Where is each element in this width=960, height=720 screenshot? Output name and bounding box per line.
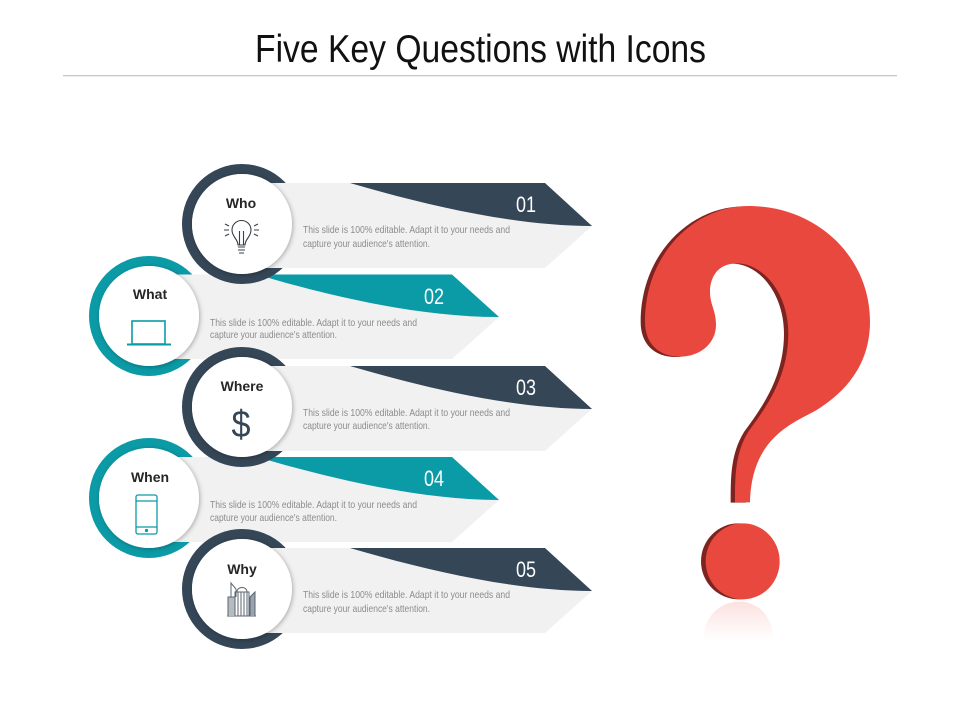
icon: smartphone [136, 495, 157, 534]
row 02: What [94, 261, 499, 371]
heading: Why [227, 561, 257, 577]
heading: When [131, 469, 169, 485]
body text [210, 317, 417, 341]
icon: laptop [127, 321, 171, 344]
body text [303, 224, 510, 250]
number: 04 [424, 466, 444, 491]
white disc [99, 266, 199, 366]
row 01: Who [187, 169, 592, 279]
teal ribbon [257, 457, 499, 500]
body text: capture your audience's attention. [210, 512, 337, 524]
ring [94, 261, 204, 371]
white disc [192, 539, 292, 639]
number: 02 [424, 284, 444, 309]
teal ribbon [257, 274, 499, 317]
dot depth [701, 523, 776, 599]
question mark [641, 206, 870, 640]
navy ribbon [350, 366, 592, 409]
body text: capture your audience's attention. [303, 238, 430, 250]
white disc [192, 357, 292, 457]
ring [187, 169, 297, 279]
white disc [99, 448, 199, 548]
heading: Who [226, 195, 256, 211]
title: Five Key Questions with Icons [255, 28, 706, 71]
body text [303, 589, 510, 615]
body text: This slide is 100% editable. Adapt it to your needs and [303, 589, 510, 601]
grey band [242, 548, 592, 633]
navy ribbon [350, 548, 592, 591]
hook [645, 206, 870, 502]
white disc [192, 174, 292, 274]
icon: dollar sign: $ [232, 404, 250, 446]
grey band [242, 183, 592, 268]
row 05: Why [187, 534, 592, 644]
body text: This slide is 100% editable. Adapt it to your needs and [303, 224, 510, 236]
navy ribbon [350, 183, 592, 226]
body text [210, 499, 417, 524]
body text: capture your audience's attention. [210, 329, 337, 341]
heading: Where [221, 378, 264, 394]
ring [187, 352, 297, 462]
grey band [149, 457, 499, 542]
body text: This slide is 100% editable. Adapt it to your needs and [303, 407, 510, 419]
number: 03 [516, 375, 536, 400]
body text: capture your audience's attention. [303, 603, 430, 615]
body text [303, 407, 510, 432]
ring [94, 443, 204, 553]
number: 01 [516, 192, 536, 217]
ring [187, 534, 297, 644]
grey band [149, 274, 499, 359]
body text: capture your audience's attention. [303, 420, 430, 432]
grey band [242, 366, 592, 451]
reflection [703, 602, 773, 640]
icon: light bulb [224, 220, 259, 253]
body text: This slide is 100% editable. Adapt it to your needs and [210, 499, 417, 511]
heading: What [133, 286, 167, 302]
icon: city buildings [227, 583, 256, 616]
row 03: Where [187, 352, 592, 462]
dot [706, 523, 780, 599]
row 04: When [94, 443, 499, 553]
hook depth [641, 206, 866, 503]
title rule [63, 75, 897, 76]
body text: This slide is 100% editable. Adapt it to your needs and [210, 317, 417, 329]
number: 05 [516, 557, 536, 582]
